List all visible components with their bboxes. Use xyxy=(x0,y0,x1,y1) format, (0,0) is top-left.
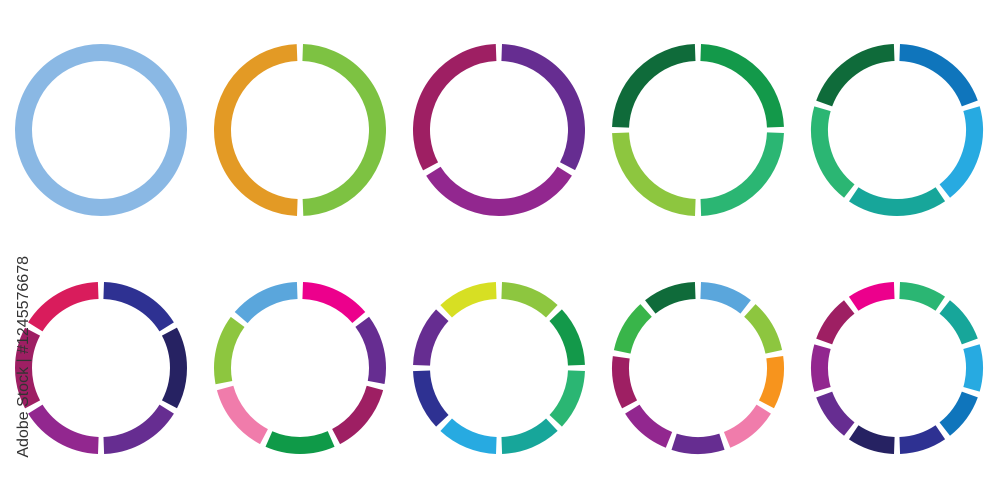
watermark id text: Adobe Stock | #1245576678 xyxy=(15,256,32,458)
ring 3: three segments xyxy=(392,23,606,237)
ring 6: six segments xyxy=(0,261,208,475)
ring 10: ten segments xyxy=(788,259,1000,477)
ring 4: four segments xyxy=(618,50,778,210)
ring 2: two segments xyxy=(220,50,380,210)
ring 8: eight segments xyxy=(389,258,609,478)
ring 1: single segment xyxy=(24,52,178,208)
ring 9: nine segments xyxy=(589,259,807,477)
ring 5: five segments xyxy=(788,21,1000,239)
ring 7: seven segments xyxy=(191,259,409,477)
